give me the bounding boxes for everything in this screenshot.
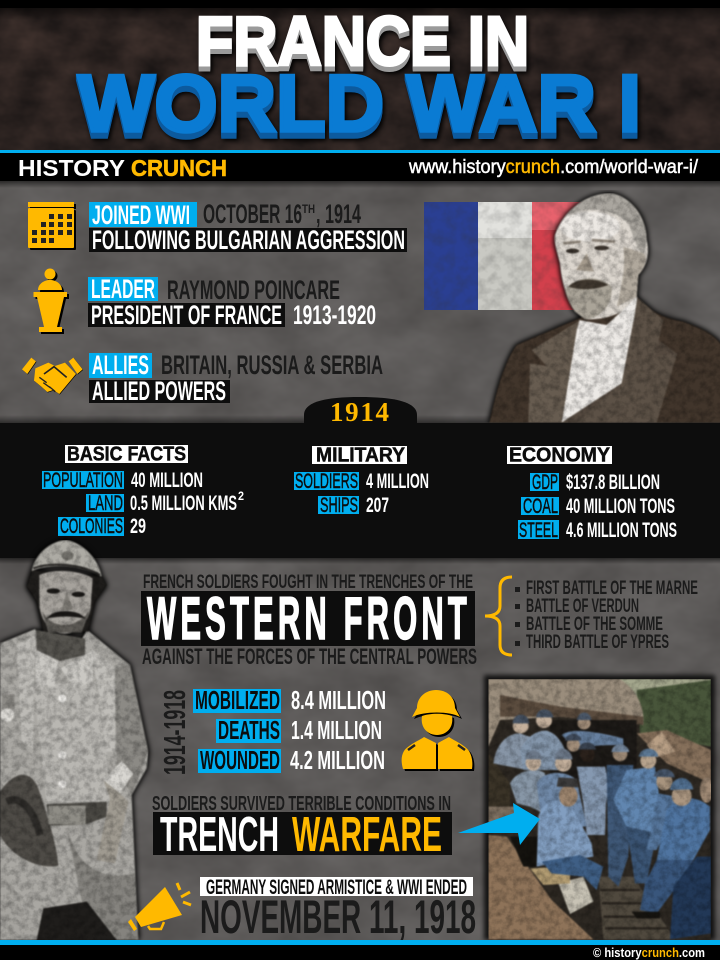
lapel left <box>528 321 579 423</box>
buttons <box>58 694 66 702</box>
box and bag <box>558 877 593 914</box>
photo: French soldier <box>0 540 148 940</box>
icon: soldier <box>402 690 472 769</box>
battle 2: BATTLE OF VERDUN <box>526 596 639 617</box>
stats column: basic facts <box>42 444 244 538</box>
date suffix: TH <box>302 202 315 216</box>
allied nations: BRITAIN, RUSSIA & SERBIA <box>161 350 383 380</box>
photo: soldiers in a trench <box>484 675 715 940</box>
copyright: © historycrunch.com <box>593 945 705 960</box>
medal <box>2 694 15 709</box>
heading: economy: ECONOMY <box>509 444 611 466</box>
front left soldiers <box>510 770 545 813</box>
coat sleeve shadow <box>115 665 148 795</box>
facial shadow <box>617 247 646 307</box>
belt <box>47 802 107 826</box>
intro line: SOLDIERS SURVIVED TERRIBLE CONDITIONS IN <box>152 793 451 815</box>
face <box>39 571 93 634</box>
key fact: allies <box>22 350 383 406</box>
colonies value: 29 <box>130 514 146 538</box>
closing line: AGAINST THE FORCES OF THE CENTRAL POWERS <box>142 644 477 669</box>
population label: POPULATION <box>43 468 123 492</box>
land value: 0.5 MILLION KMS <box>130 491 237 515</box>
soldiers value: 4 MILLION <box>366 469 429 493</box>
middle row soldiers <box>577 767 608 835</box>
coat lower skirt <box>67 828 138 940</box>
arrow pointing to photo <box>458 803 540 845</box>
mobilized value: 8.4 MILLION <box>291 685 386 715</box>
vertical years label: 1914-1918 <box>157 690 192 775</box>
steel label: STEEL <box>519 518 558 542</box>
header textured background <box>0 8 720 150</box>
land unit exponent: 2 <box>238 489 244 503</box>
shirt <box>562 297 637 423</box>
leader role: PRESIDENT OF FRANCE <box>91 300 282 330</box>
ships label: SHIPS <box>320 493 358 517</box>
back row soldiers <box>493 733 530 770</box>
title line: World War I: WORLD WAR I <box>78 59 641 149</box>
front right soldiers <box>657 798 710 860</box>
key fact: leader <box>34 268 376 332</box>
key fact: joined WWI <box>28 199 407 255</box>
wounded value: 4.2 MILLION <box>290 745 385 775</box>
ships value: 207 <box>366 493 389 517</box>
title line: France in: FRANCE IN <box>196 2 529 80</box>
leader name: RAYMOND POINCARE <box>167 275 340 305</box>
flag of France <box>424 202 592 310</box>
panel: 1914 statistics <box>0 397 720 558</box>
coat <box>489 297 720 423</box>
armistice date: NOVEMBER 11, 1918 <box>200 890 476 943</box>
scarf <box>36 630 85 661</box>
eyes <box>47 588 60 594</box>
label: allies: ALLIES <box>92 350 149 380</box>
brand bar <box>0 150 720 181</box>
alliance: ALLIED POWERS <box>92 376 226 406</box>
wounded label: WOUNDED <box>200 745 280 775</box>
coal label: COAL <box>523 494 558 518</box>
colonies label: COLONIES <box>60 514 123 538</box>
trousers <box>37 902 117 940</box>
website url: www.historycrunch.com/world-war-i/ <box>408 156 699 178</box>
icon: calendar <box>28 202 74 248</box>
list: major battles <box>515 578 698 653</box>
helmet carried on belt <box>0 775 58 866</box>
section: armistice <box>200 876 476 943</box>
heading: military: MILITARY <box>316 444 406 466</box>
heading: warfare: WARFARE <box>292 808 442 862</box>
casualty statistics <box>157 685 386 775</box>
stats column: military <box>294 444 429 517</box>
brand name accent: CRUNCH <box>131 155 227 181</box>
population value: 40 MILLION <box>131 468 203 492</box>
beard <box>565 278 612 319</box>
GDP value: $137.8 BILLION <box>566 470 660 494</box>
duckboards <box>598 877 675 939</box>
land label: LAND <box>88 491 123 515</box>
moustache <box>50 612 82 617</box>
year tab <box>304 397 417 424</box>
section: trench warfare <box>152 793 452 862</box>
trench background <box>620 679 711 697</box>
bracket <box>485 577 512 655</box>
date: OCTOBER 16 <box>203 199 302 229</box>
year: 1914 <box>330 397 389 427</box>
soldier hair <box>27 570 107 632</box>
deaths value: 1.4 MILLION <box>291 715 382 745</box>
reason: FOLLOWING BULGARIAN AGGRESSION <box>92 225 405 255</box>
soldier body <box>0 629 148 940</box>
title <box>78 2 641 149</box>
GDP label: GDP <box>532 470 558 494</box>
head <box>555 193 648 319</box>
lapel right <box>632 298 677 416</box>
seated officer <box>537 801 593 867</box>
heading: basic facts: BASIC FACTS <box>67 444 186 466</box>
icon: podium <box>34 268 67 332</box>
intro line: FRENCH SOLDIERS FOUGHT IN THE TRENCHES OF THE <box>143 571 473 593</box>
holster <box>97 761 133 863</box>
icon: megaphone <box>128 883 191 931</box>
deaths label: DEATHS <box>218 715 280 745</box>
nose shadow <box>62 592 73 610</box>
heading: trench: TRENCH <box>160 808 279 862</box>
soldiers label: SOLDIERS <box>295 469 358 493</box>
label: leader: LEADER <box>91 274 155 304</box>
lower textured background <box>0 181 720 941</box>
term dates: 1913-1920 <box>293 300 376 330</box>
stats column: economy <box>507 444 677 542</box>
eyes <box>566 249 579 253</box>
foreground mound <box>488 835 593 939</box>
mobilized label: MOBILIZED <box>195 685 280 715</box>
waistcoat <box>562 322 677 423</box>
brand name: HISTORY <box>18 155 125 181</box>
date year: , 1914 <box>316 199 361 229</box>
coat chest <box>33 682 110 802</box>
nose <box>576 253 594 272</box>
coat collar <box>35 650 58 687</box>
portrait: Raymond Poincare <box>489 193 720 423</box>
section: Western Front <box>141 571 477 669</box>
footer <box>0 940 720 960</box>
hair <box>567 193 647 255</box>
armistice line: GERMANY SIGNED ARMISTICE & WWI ENDED <box>206 876 467 899</box>
helmet <box>32 540 102 577</box>
forehead highlight <box>560 212 620 242</box>
icon: handshake <box>22 358 83 394</box>
label: joined WWI: JOINED WWI <box>92 200 190 230</box>
